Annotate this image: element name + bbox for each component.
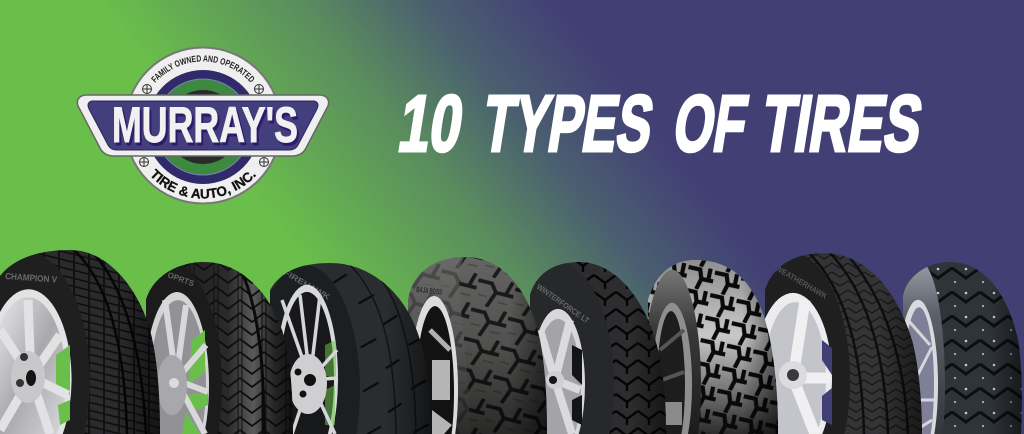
title: 10 [393, 79, 469, 169]
title: TIRES [756, 79, 928, 169]
sidewall label: WINTERFORCE LT [535, 282, 591, 325]
sidewall label: CHAMPION V [5, 271, 57, 285]
tire 3: performance [270, 263, 429, 434]
logo wordmark shadow: MURRAY'S [114, 100, 300, 156]
logo top text: FAMILY OWNED AND OPERATED [151, 55, 254, 83]
logo wordmark: MURRAY'S [112, 97, 298, 153]
tire 6: mud terrain [643, 255, 780, 434]
sidewall label: FIREHAWK [282, 268, 332, 302]
logo outer badge ring [125, 48, 281, 204]
sidewall label: BAJA BOSS [416, 285, 443, 297]
sidewall label: OPRTS [166, 270, 196, 289]
tire 5: winter LT [530, 262, 666, 434]
logo bottom text: TIRE & AUTO, INC. [152, 168, 256, 199]
logo wheel icons [140, 84, 268, 166]
tire 7: touring all-season [765, 253, 922, 434]
title: TYPES [477, 79, 659, 169]
logo: Murray's Tire & Auto [76, 46, 330, 204]
logo banner inner [88, 101, 318, 150]
tire 8: studded winter [903, 262, 1022, 434]
logo banner [77, 95, 329, 156]
logo inner rings [146, 70, 260, 184]
sidewall label: WEATHERHAWK [774, 264, 829, 301]
tire 1: all-season [0, 248, 162, 434]
tire 2: gloss touring [146, 262, 293, 434]
title: OF [668, 79, 753, 169]
tire 4: all-terrain [405, 252, 550, 434]
